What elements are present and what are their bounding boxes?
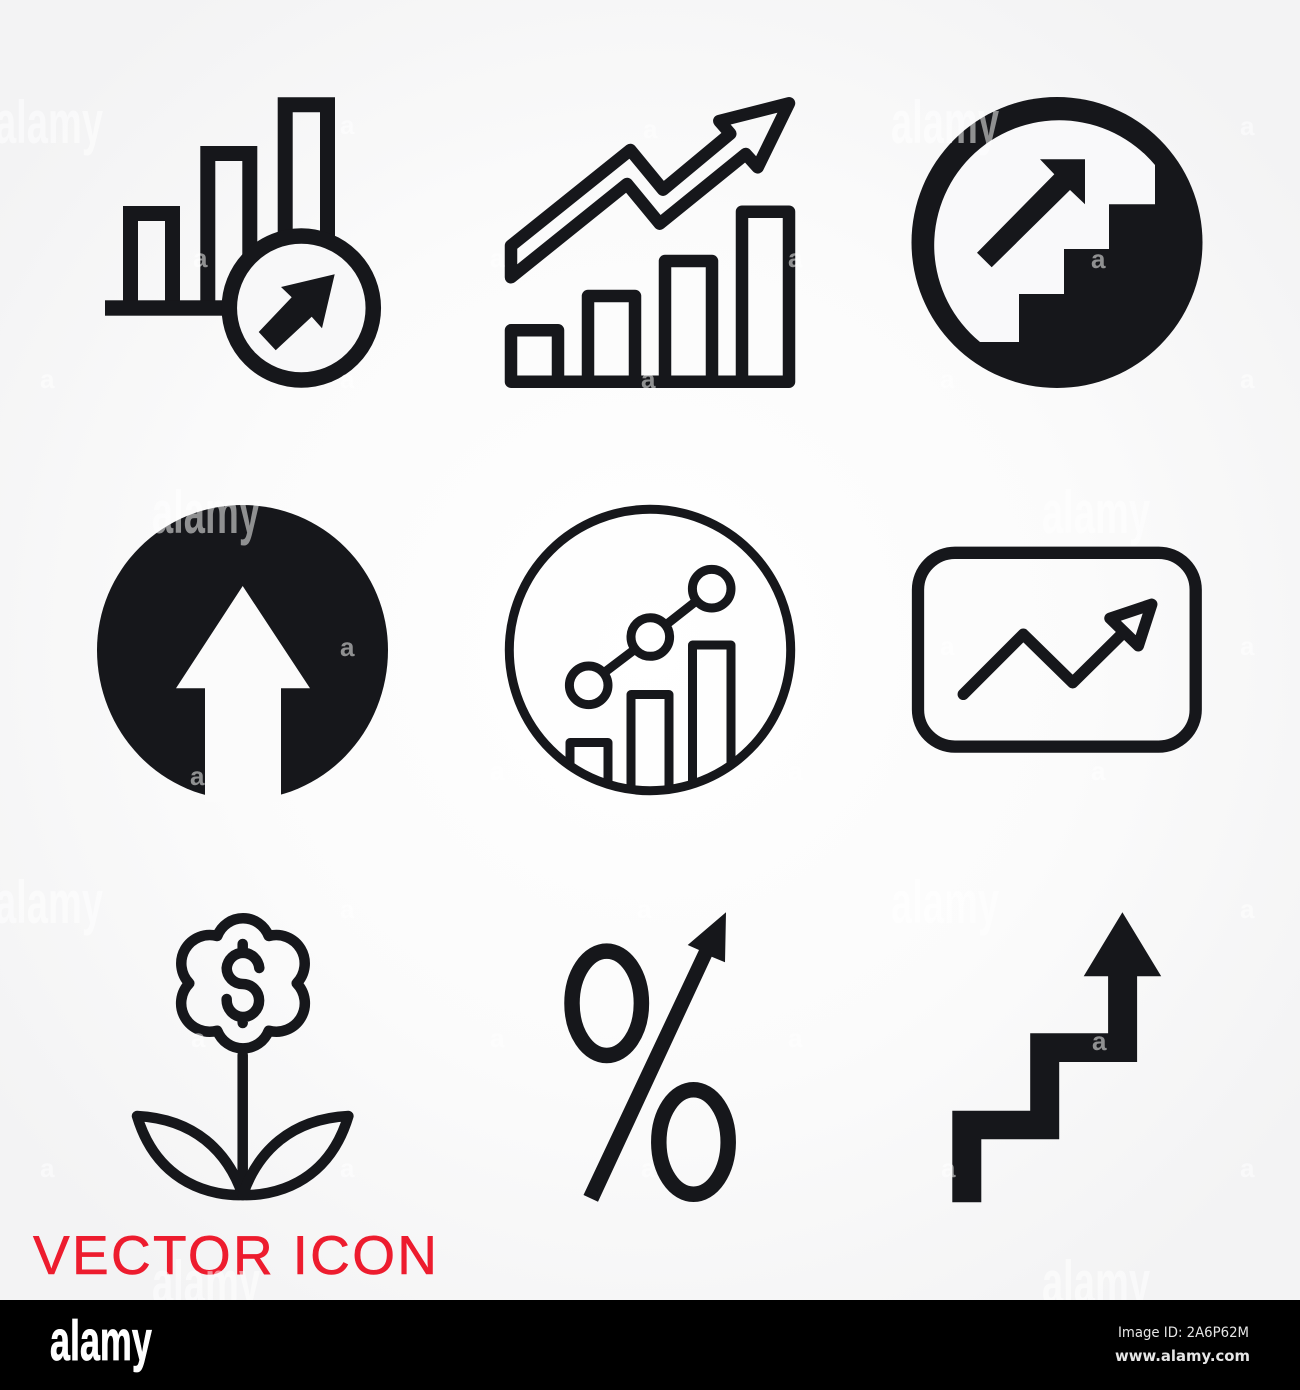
watermark: alamy	[1042, 479, 1150, 546]
data points	[569, 666, 608, 705]
bars	[570, 645, 731, 800]
watermark: a	[490, 756, 505, 786]
watermark: a	[940, 364, 955, 394]
frame	[918, 553, 1196, 747]
footer logo: alamy	[50, 1310, 152, 1373]
watermark: a	[1091, 756, 1106, 786]
stair cut-out	[934, 120, 1155, 342]
black disc	[912, 97, 1202, 388]
top ring	[572, 951, 641, 1056]
outer ring	[509, 509, 791, 791]
watermark: a	[193, 243, 208, 273]
watermark: a	[1240, 364, 1255, 394]
stem	[237, 1055, 248, 1195]
watermark: a	[340, 894, 355, 924]
watermark: alamy	[152, 479, 260, 546]
arrow head	[1110, 604, 1152, 646]
flower head	[181, 918, 305, 1048]
caption: VECTOR ICON	[33, 1224, 437, 1286]
watermark: a	[1091, 244, 1106, 274]
watermark: a	[1240, 894, 1255, 924]
watermark: alamy	[891, 869, 999, 936]
icon: stepped arrow	[952, 912, 1161, 1202]
watermark: a	[641, 1153, 656, 1183]
badge arrow	[259, 274, 335, 350]
connecting lines	[605, 602, 695, 672]
watermark: a	[788, 756, 803, 786]
black disc	[97, 505, 388, 800]
icon: trend line in rounded frame	[918, 553, 1196, 747]
watermark: a	[1092, 1026, 1107, 1056]
icon: stairs with arrow in circle	[912, 97, 1202, 388]
right leaf	[243, 1116, 348, 1195]
watermark: a	[641, 364, 656, 394]
icon: bar chart with arrow badge	[105, 105, 373, 380]
icon: percent with arrow	[572, 912, 728, 1202]
website: www.alamy.com	[1115, 1347, 1250, 1365]
bars	[511, 212, 789, 382]
watermark: alamy	[1042, 1249, 1150, 1316]
watermark: alamy	[891, 89, 999, 156]
watermark: a	[1240, 631, 1255, 661]
icon: rising arrow over bars	[511, 103, 789, 382]
white arrow	[176, 586, 310, 802]
watermark: a	[1240, 1153, 1255, 1183]
icon: up arrow in solid circle	[97, 505, 388, 802]
watermark: a	[637, 894, 652, 924]
watermark: a	[340, 632, 355, 662]
watermark: a	[940, 631, 955, 661]
icon: money flower	[137, 918, 348, 1195]
watermark: a	[1240, 111, 1255, 141]
watermark: a	[40, 364, 55, 394]
watermark: a	[788, 1023, 803, 1053]
outline arrow	[511, 103, 789, 277]
arrow badge	[229, 236, 373, 380]
dollar symbol	[227, 944, 259, 1023]
slash arrow	[584, 912, 726, 1202]
watermark: a	[788, 243, 803, 273]
watermark: a	[340, 110, 355, 140]
watermark: a	[40, 1153, 55, 1183]
baseline	[105, 300, 235, 316]
watermark: a	[191, 1023, 206, 1053]
watermark: a	[340, 1153, 355, 1183]
watermark: a	[340, 364, 355, 394]
watermark: a	[941, 1153, 956, 1183]
left leaf	[137, 1116, 243, 1195]
icon: line and bar chart in ring	[509, 509, 791, 800]
diagonal arrow	[977, 159, 1085, 267]
bars	[130, 105, 328, 305]
watermark: a	[490, 1023, 505, 1053]
footer bar	[0, 1300, 1300, 1390]
watermark: a	[643, 114, 658, 144]
image id: Image ID: 2A6P62M	[1118, 1325, 1249, 1341]
bottom ring	[659, 1090, 728, 1194]
trend line	[963, 633, 1123, 694]
watermark: a	[190, 761, 205, 791]
watermark: alamy	[152, 1249, 260, 1316]
watermark: a	[490, 243, 505, 273]
